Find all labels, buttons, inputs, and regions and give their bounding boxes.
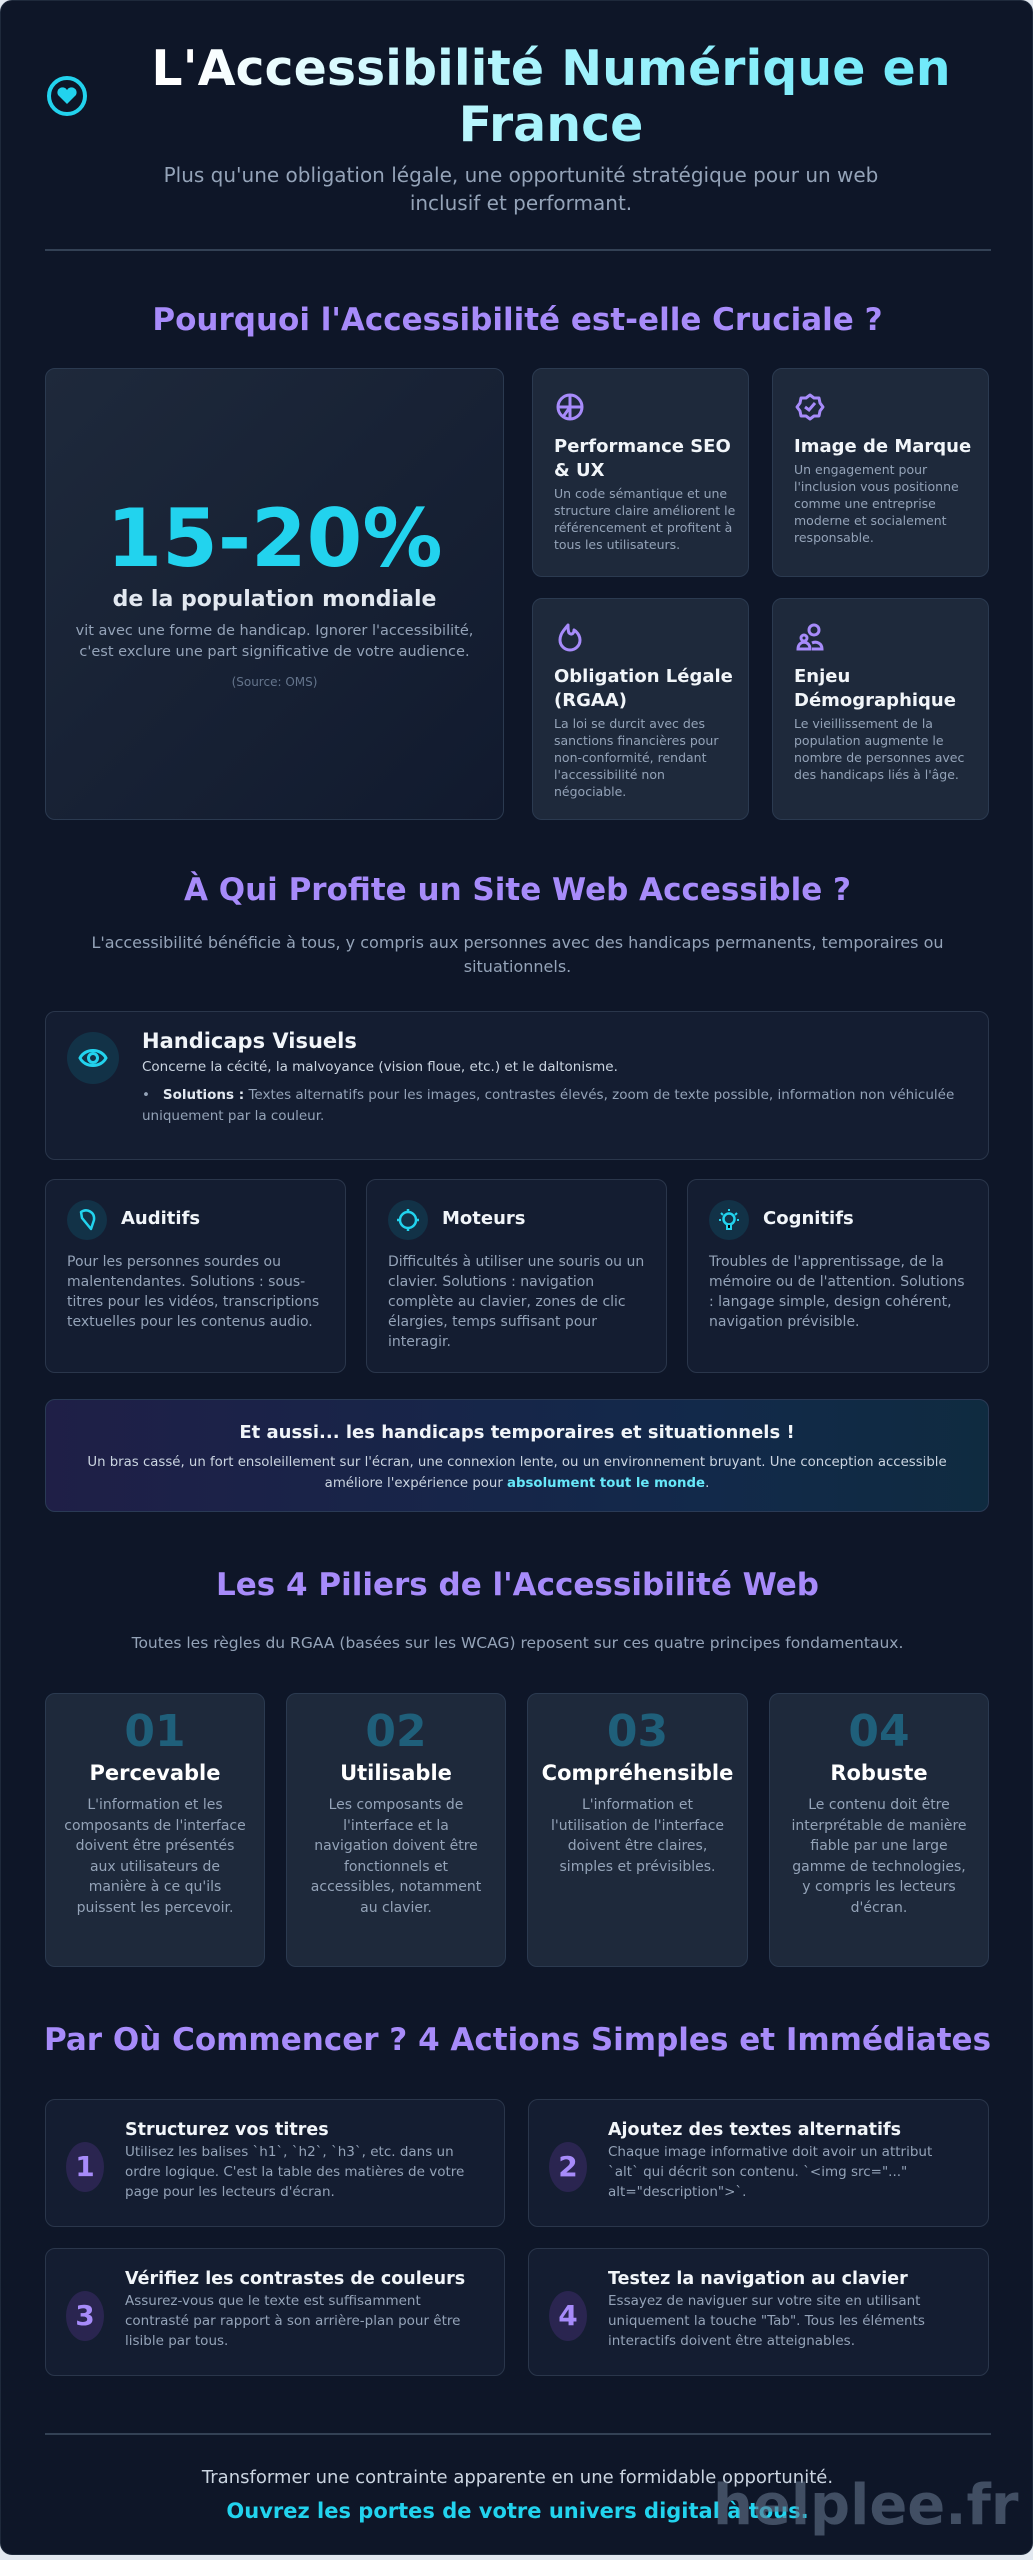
pillar 01: 01: [124, 1706, 186, 1757]
panel: auditifs: Auditifs: [121, 1208, 200, 1229]
card: image de marque: [772, 368, 989, 577]
source: (Source: OMS): [232, 675, 317, 689]
icon: gear: [388, 1200, 428, 1240]
title: [101, 41, 1001, 153]
pillar 01: L'information et les composants de l'interface doivent être présentés aux utilisateurs de manière à ce qu'ils puissent les percevoir.: [64, 1797, 246, 1916]
pillar 03: 03: [607, 1706, 668, 1757]
callout: temporaires: [45, 1399, 989, 1512]
panel: handicaps visuels: Concerne la cécité, la malvoyance (vision floue, etc.) et le daltonisme.: [142, 1059, 618, 1075]
heading: pourquoi: Pourquoi l'Accessibilité est-elle Cruciale ?: [152, 302, 883, 338]
action 4: Testez la navigation au clavier: [608, 2269, 908, 2289]
subtitle: Plus qu'une obligation légale, une opportunité stratégique pour un web inclusif et performant.: [164, 163, 878, 215]
panel: moteurs: [366, 1179, 667, 1373]
pillar 03: L'information et l'utilisation de l'interface doivent être claires, simples et prévisibles.: [551, 1797, 724, 1874]
action 4: Essayez de naviguer sur votre site en utilisant uniquement la touche "Tab". Tous les éléments interactifs doivent être atteignables.: [608, 2293, 925, 2349]
action 3: [45, 2248, 505, 2376]
panel: cognitifs: Cognitifs: [763, 1208, 854, 1229]
stat text: vit avec une forme de handicap. Ignorer l'accessibilité, c'est exclure une part significative de votre audience.: [76, 623, 473, 660]
action 2: Chaque image informative doit avoir un attribut `alt` qui décrit son contenu. `<img src="..." alt="description">`.: [608, 2144, 932, 2200]
icon: lightbulb: [709, 1200, 749, 1240]
action 4: 4: [558, 2299, 578, 2332]
card: obligation: Obligation Légale (RGAA): [554, 666, 733, 711]
pillar 02: 02: [365, 1706, 427, 1757]
icon: flame: [558, 624, 582, 652]
action 3: Vérifiez les contrastes de couleurs: [125, 2269, 465, 2289]
card: SEO: Performance SEO & UX: [554, 436, 731, 481]
card: SEO: [532, 368, 749, 577]
card: image de marque: Un engagement pour l'inclusion vous positionne comme une entreprise moderne et socialement responsable.: [794, 462, 959, 545]
pillar 01: Percevable: [89, 1761, 220, 1785]
panel: cognitifs: Troubles de l'apprentissage, de la mémoire ou de l'attention. Solutions : langage simple, design cohérent, navigation prévisible.: [709, 1254, 965, 1330]
icon: eye: [67, 1032, 119, 1084]
card: démographique: [772, 598, 989, 820]
panel: handicaps visuels: • Solutions : Textes alternatifs pour les images, contrastes élevés, zoom de texte possible, information non véhiculée uniquement par la couleur.: [142, 1087, 954, 1124]
action 4: [528, 2248, 989, 2376]
pillar 02: [286, 1693, 506, 1967]
action 1: 1: [75, 2150, 95, 2183]
pillar 02: Utilisable: [340, 1761, 452, 1785]
action 2: [528, 2099, 989, 2227]
stat label: de la population mondiale: [113, 587, 436, 612]
stat number: 15-20%: [106, 492, 442, 585]
card: image de marque: Image de Marque: [794, 436, 971, 457]
icon: badge check: [796, 394, 824, 420]
pillar 02: Les composants de l'interface et la navigation doivent être fonctionnels et accessibles, notamment au clavier.: [311, 1797, 481, 1916]
footer text: Transformer une contrainte apparente en une formidable opportunité.: [202, 2467, 833, 2488]
card: démographique: Enjeu Démographique: [794, 666, 956, 711]
action 2: Ajoutez des textes alternatifs: [608, 2120, 901, 2140]
action 3: 3: [75, 2299, 95, 2332]
heading: 4 piliers: Les 4 Piliers de l'Accessibilité Web: [216, 1567, 819, 1603]
panel: auditifs: Pour les personnes sourdes ou malentendantes. Solutions : sous-titres pour les vidéos, transcriptions textuelles pour les contenus audio.: [67, 1254, 319, 1330]
title: France: [459, 96, 643, 153]
card: démographique: Le vieillissement de la population augmente le nombre de personnes avec des handicaps liés à l'âge.: [794, 716, 964, 782]
pillar 01: [45, 1693, 265, 1967]
action 1: [45, 2099, 505, 2227]
callout: temporaires: Et aussi... les handicaps temporaires et situationnels !: [239, 1422, 795, 1443]
action 1: Utilisez les balises `h1`, `h2`, `h3`, etc. dans un ordre logique. C'est la table des matières de votre page pour les lecteurs d'écran.: [125, 2144, 464, 2200]
callout: temporaires: améliore l'expérience pour absolument tout le monde.: [325, 1476, 709, 1491]
icon: users: [796, 624, 824, 650]
intro text: Toutes les règles du RGAA (basées sur les WCAG) reposent sur ces quatre principes fondamentaux.: [132, 1634, 903, 1652]
icon: logo heart: [47, 76, 87, 116]
title: L'Accessibilité Numérique en: [151, 40, 951, 97]
pillar 03: [527, 1693, 748, 1967]
intro text: L'accessibilité bénéficie à tous, y compris aux personnes avec des handicaps permanents, temporaires ou situationnels.: [91, 933, 944, 976]
icon: ear: [67, 1200, 107, 1240]
card: obligation: [532, 598, 749, 820]
card: SEO: Un code sémantique et une structure claire améliorent le référencement et profitent à tous les utilisateurs.: [554, 486, 735, 552]
panel: auditifs: [45, 1179, 346, 1373]
action 1: Structurez vos titres: [125, 2120, 329, 2140]
panel: handicaps visuels: Handicaps Visuels: [142, 1029, 357, 1053]
pillar 04: [769, 1693, 989, 1967]
panel: cognitifs: [687, 1179, 989, 1373]
pillar 03: Compréhensible: [542, 1761, 733, 1785]
pillar 04: Le contenu doit être interprétable de manière fiable par une large gamme de technologies, y compris les lecteurs d'écran.: [791, 1797, 967, 1916]
watermark: helplee.fr: [713, 2473, 1019, 2538]
icon: globe: [556, 394, 584, 420]
action 2: 2: [558, 2150, 578, 2183]
panel: moteurs: Moteurs: [442, 1208, 526, 1229]
card: obligation: La loi se durcit avec des sanctions financières pour non-conformité, rendant l'accessibilité non négociable.: [554, 716, 718, 799]
panel: big stat: [45, 368, 504, 820]
pillar 04: 04: [848, 1706, 910, 1757]
heading: à qui profite: À Qui Profite un Site Web Accessible ?: [184, 872, 851, 908]
action 3: Assurez-vous que le texte est suffisamment contrasté par rapport à son arrière-plan pour être lisible par tous.: [125, 2293, 460, 2349]
callout: temporaires: Un bras cassé, un fort ensoleillement sur l'écran, une connexion lente, ou un environnement bruyant. Une conception accessible: [87, 1455, 947, 1470]
pillar 04: Robuste: [830, 1761, 928, 1785]
footer cta: Ouvrez les portes de votre univers digital à tous.: [226, 2499, 809, 2523]
heading: par où commencer: Par Où Commencer ? 4 Actions Simples et Immédiates: [44, 2022, 991, 2058]
panel: moteurs: Difficultés à utiliser une souris ou un clavier. Solutions : navigation complète au clavier, zones de clic élargies, temps suffisant pour interagir.: [388, 1254, 644, 1350]
panel: handicaps visuels: [45, 1011, 989, 1160]
